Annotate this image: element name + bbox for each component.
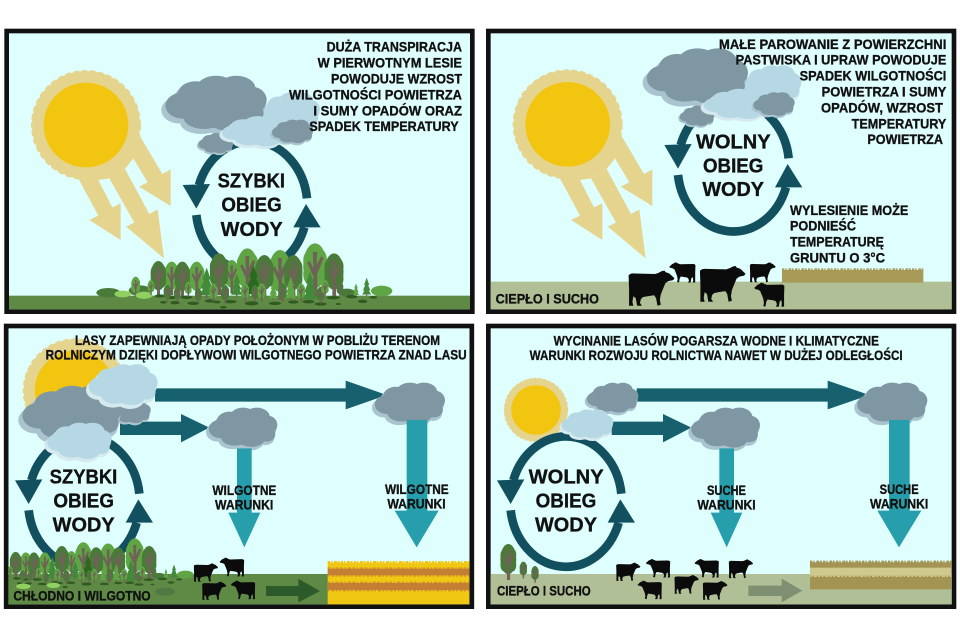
icon: bushes left of forest bbox=[96, 277, 152, 299]
top message: WARUNKI ROZWOJU ROLNICTWA NAWET W DUŻEJ ODLEGŁOŚCI bbox=[530, 348, 903, 363]
icon: cows bbox=[629, 262, 784, 307]
temperature note bbox=[790, 203, 908, 265]
icon: bushes on ground bbox=[16, 583, 175, 596]
icon: far rain cloud bbox=[372, 383, 445, 427]
top message: LASY ZAPEWNIAJĄ OPADY POŁOŻONYM W POBLIŻU TERENOM bbox=[75, 333, 440, 348]
arrow towards field bbox=[748, 579, 802, 602]
icon: cows bbox=[616, 559, 753, 600]
top message bbox=[46, 333, 467, 363]
cycle label: WOLNY bbox=[529, 466, 604, 488]
cycle label: SZYBKI bbox=[218, 171, 285, 193]
icon: dry crop field bbox=[810, 562, 951, 589]
description text: PASTWISKA I UPRAW POWODUJE bbox=[736, 53, 946, 68]
icon: clouds bbox=[643, 48, 801, 128]
cycle label: OBIEG bbox=[221, 195, 282, 217]
far rain arrow bbox=[395, 420, 439, 547]
description text: POWIETRZA bbox=[867, 132, 943, 147]
panel: pierwotny las, szybki obieg wody bbox=[7, 31, 472, 312]
far dryness label bbox=[870, 482, 928, 511]
far moisture label: WILGOTNE bbox=[385, 482, 449, 497]
description text: MAŁE PAROWANIE Z POWIERZCHNI bbox=[719, 37, 946, 52]
description text: W PIERWOTNYM LESIE bbox=[318, 56, 462, 71]
icon: forest bbox=[8, 538, 194, 588]
cycle label: WODY bbox=[702, 179, 764, 201]
cycle label: WODY bbox=[535, 514, 597, 536]
cycle label: OBIEG bbox=[53, 490, 114, 512]
icon: cloud cluster over forest bbox=[18, 364, 158, 462]
ground label: CHŁODNO I WILGOTNO bbox=[13, 588, 151, 603]
temperature note: WYLESIENIE MOŻE bbox=[790, 203, 908, 218]
cycle label: OBIEG bbox=[536, 490, 596, 512]
ground bbox=[8, 574, 469, 604]
panel frame and sky bbox=[488, 326, 954, 607]
icon: sun rays arrows bbox=[559, 120, 652, 258]
cycle label: OBIEG bbox=[703, 155, 763, 177]
description text: SPADEK WILGOTNOŚCI bbox=[800, 69, 946, 84]
icon: cows bbox=[194, 558, 255, 600]
fast water cycle arrows bbox=[183, 141, 321, 271]
icon: sun rays arrows bbox=[77, 120, 171, 258]
icon: remaining trees bbox=[500, 544, 539, 583]
panel: las zapewnia opady terenom rolniczym bbox=[6, 326, 472, 607]
ground label: CIEPŁO I SUCHO bbox=[497, 584, 591, 599]
near rain arrow bbox=[228, 448, 260, 547]
cycle label bbox=[696, 131, 771, 201]
icon: far dry cloud bbox=[854, 383, 927, 427]
cycle label bbox=[529, 466, 604, 536]
near dryness label: SUCHE bbox=[707, 483, 746, 498]
top message bbox=[530, 334, 903, 363]
far rain arrow bbox=[877, 420, 921, 547]
near dryness label bbox=[697, 483, 756, 512]
description text: TEMPERATURY bbox=[852, 116, 946, 131]
icon: sun bbox=[32, 71, 140, 179]
icon: sun bbox=[504, 378, 568, 442]
description text bbox=[289, 40, 463, 134]
far moisture label bbox=[385, 482, 449, 511]
fast water cycle arrows bbox=[15, 436, 153, 567]
far moisture label: WARUNKI bbox=[387, 496, 446, 511]
icon: near rain cloud bbox=[206, 408, 277, 451]
panel: pastwisko, wolny obieg wody bbox=[488, 31, 954, 312]
ground label: CIEPŁO I SUCHO bbox=[496, 292, 599, 307]
description text bbox=[719, 37, 946, 147]
ground bbox=[491, 574, 952, 604]
cycle label bbox=[218, 171, 285, 241]
cycle label: WODY bbox=[53, 514, 115, 536]
icon: primary forest bbox=[148, 243, 392, 309]
slow water cycle arrows bbox=[497, 436, 635, 567]
description text: DUŻA TRANSPIRACJA bbox=[327, 40, 462, 55]
icon: dry crop field bbox=[782, 269, 923, 283]
long moisture arrow bbox=[637, 381, 869, 409]
description text: SPADEK TEMPERATURY bbox=[309, 119, 459, 134]
top message: ROLNICZYM DZIĘKI DOPŁYWOWI WILGOTNEGO POWIETRZA ZNAD LASU bbox=[46, 348, 467, 363]
panel frame and sky bbox=[6, 326, 472, 607]
panel: wycinanie lasow pogarsza warunki bbox=[488, 326, 954, 607]
description text: WILGOTNOŚCI POWIETRZA bbox=[289, 87, 462, 102]
short moisture arrow bbox=[612, 414, 691, 442]
icon: small dark cloud bbox=[585, 383, 638, 415]
far dryness label: WARUNKI bbox=[870, 496, 928, 511]
near dryness label: WARUNKI bbox=[697, 497, 756, 512]
icon: sun bbox=[514, 70, 622, 178]
short moisture arrow bbox=[120, 414, 209, 442]
long moisture arrow bbox=[155, 381, 387, 409]
cycle label: WODY bbox=[221, 219, 283, 241]
panel frame and sky bbox=[488, 31, 954, 312]
description text: POWIETRZA I SUMY bbox=[822, 84, 946, 99]
temperature note: GRUNTU O 3°C bbox=[790, 250, 885, 265]
cycle label: WOLNY bbox=[696, 131, 771, 153]
ground bbox=[9, 296, 470, 309]
description text: I SUMY OPADÓW ORAZ bbox=[313, 103, 462, 118]
arrow towards field bbox=[266, 579, 320, 602]
far dryness label: SUCHE bbox=[880, 482, 919, 497]
icon: small light cloud bbox=[559, 409, 613, 441]
slow water cycle arrows bbox=[664, 101, 802, 231]
near moisture label bbox=[212, 483, 276, 512]
near moisture label: WARUNKI bbox=[215, 497, 273, 512]
icon: clouds bbox=[161, 76, 320, 155]
icon: healthy crop field bbox=[328, 562, 469, 604]
panel frame and sky bbox=[7, 31, 472, 312]
ground bbox=[491, 282, 952, 309]
near moisture label: WILGOTNE bbox=[212, 483, 276, 498]
cycle label: SZYBKI bbox=[50, 466, 117, 488]
temperature note: TEMPERATURĘ bbox=[790, 235, 884, 250]
description text: POWODUJE WZROST bbox=[331, 71, 463, 86]
description text: OPADÓW, WZROST bbox=[821, 100, 944, 115]
icon: sun bbox=[24, 339, 126, 442]
top message: WYCINANIE LASÓW POGARSZA WODNE I KLIMATYCZNE bbox=[554, 334, 879, 349]
near rain arrow bbox=[711, 448, 742, 547]
icon: near dry cloud bbox=[688, 408, 760, 451]
cycle label bbox=[50, 466, 117, 536]
temperature note: PODNIEŚĆ bbox=[790, 219, 856, 234]
